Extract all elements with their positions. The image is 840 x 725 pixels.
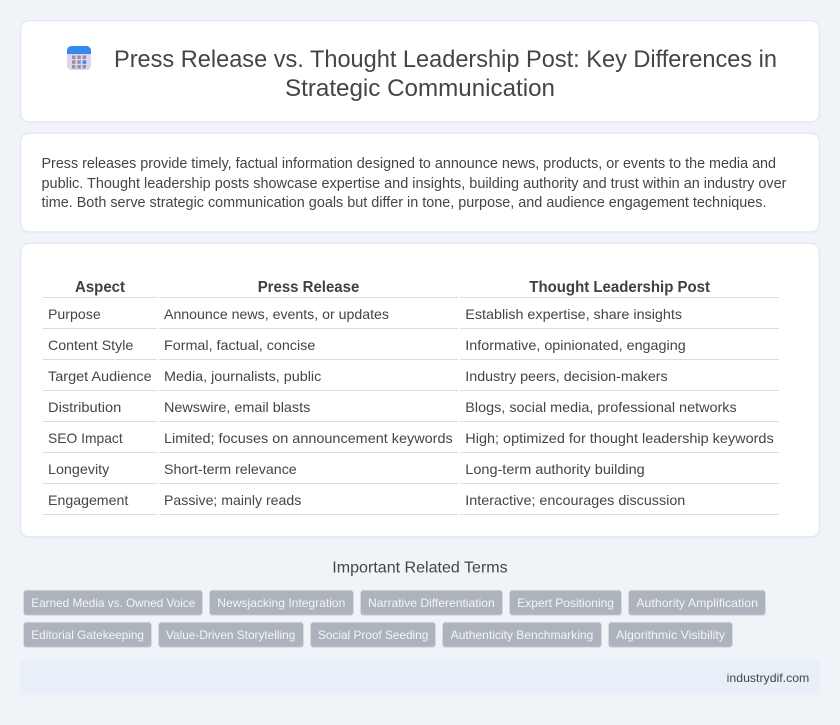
intro paragraph: public. Thought leadership posts showcase expertise and insights, building authority and trust within an industry over bbox=[42, 176, 787, 192]
table header row: Aspect bbox=[75, 279, 126, 296]
tag: newsjacking bbox=[210, 590, 354, 615]
intro paragraph: Press releases provide timely, factual information designed to announce news, products, or events to the media and bbox=[42, 156, 776, 172]
row: seo impact: Limited; focuses on announcement keywords bbox=[164, 430, 453, 446]
tag: social proof seeding: Social Proof Seeding bbox=[318, 628, 428, 642]
row: purpose: Establish expertise, share insights bbox=[465, 306, 682, 322]
header panel bbox=[21, 21, 819, 122]
table header row: Thought Leadership Post bbox=[529, 279, 711, 296]
row: distribution: Newswire, email blasts bbox=[164, 399, 310, 415]
table header row: Press Release bbox=[258, 279, 359, 296]
tag: narrative differentiation: Narrative Differentiation bbox=[368, 596, 495, 610]
tag: authority amplification: Authority Amplification bbox=[636, 596, 758, 610]
tag: algorithmic visibility: Algorithmic Visibility bbox=[616, 628, 725, 642]
heading: important related terms: Important Related Terms bbox=[332, 560, 508, 576]
intro paragraph bbox=[42, 156, 787, 211]
row: seo impact bbox=[43, 430, 779, 453]
tag: editorial gatekeeping: Editorial Gatekeeping bbox=[31, 628, 144, 642]
row: content style: Informative, opinionated, engaging bbox=[465, 337, 686, 353]
title bbox=[114, 46, 777, 102]
row: longevity: Long-term authority building bbox=[465, 461, 645, 477]
related terms tags bbox=[24, 590, 766, 647]
footer: industrydif.com bbox=[727, 671, 809, 685]
row: distribution: Blogs, social media, professional networks bbox=[465, 399, 737, 415]
table header row bbox=[43, 279, 779, 298]
row: purpose: Purpose bbox=[48, 306, 101, 322]
row: content style bbox=[43, 337, 779, 360]
panel: introduction bbox=[21, 133, 819, 232]
row: content style: Content Style bbox=[48, 337, 134, 353]
row: distribution bbox=[43, 399, 779, 422]
row: target audience: Target Audience bbox=[48, 368, 152, 384]
tag: earned media: Earned Media vs. Owned Voice bbox=[31, 596, 196, 610]
row: longevity bbox=[43, 461, 779, 484]
tag: authenticity benchmarking bbox=[442, 622, 602, 647]
tag: authority amplification bbox=[628, 590, 766, 615]
tag: expert positioning bbox=[510, 590, 622, 615]
row: engagement: Interactive; encourages discussion bbox=[465, 492, 685, 508]
title: Press Release vs. Thought Leadership Post: Key Differences in bbox=[114, 46, 777, 73]
panel: comparison table bbox=[21, 243, 819, 537]
tag: editorial gatekeeping bbox=[24, 622, 152, 647]
row: distribution: Distribution bbox=[48, 399, 121, 415]
tag: algorithmic visibility bbox=[608, 622, 732, 647]
title: Strategic Communication bbox=[285, 75, 555, 102]
row: seo impact: High; optimized for thought leadership keywords bbox=[465, 430, 774, 446]
tag: value-driven storytelling: Value-Driven Storytelling bbox=[166, 628, 295, 642]
row: engagement: Passive; mainly reads bbox=[164, 492, 301, 508]
tag: social proof seeding bbox=[310, 622, 436, 647]
tag: value-driven storytelling bbox=[158, 622, 304, 647]
tag: expert positioning: Expert Positioning bbox=[517, 596, 614, 610]
row: engagement: Engagement bbox=[48, 492, 128, 508]
tag: newsjacking: Newsjacking Integration bbox=[217, 596, 345, 610]
row: target audience bbox=[43, 368, 779, 391]
tag: earned media bbox=[24, 590, 202, 615]
row: purpose bbox=[43, 306, 779, 329]
row: longevity: Longevity bbox=[48, 461, 109, 477]
footer bbox=[20, 661, 820, 695]
tag: narrative differentiation bbox=[360, 590, 502, 615]
row: purpose: Announce news, events, or updates bbox=[164, 306, 389, 322]
icon: calendar bbox=[67, 46, 91, 70]
row: target audience: Industry peers, decision-makers bbox=[465, 368, 668, 384]
row: longevity: Short-term relevance bbox=[164, 461, 297, 477]
tag: authenticity benchmarking: Authenticity Benchmarking bbox=[451, 628, 593, 642]
row: seo impact: SEO Impact bbox=[48, 430, 123, 446]
row: engagement bbox=[43, 492, 779, 515]
row: content style: Formal, factual, concise bbox=[164, 337, 316, 353]
row: target audience: Media, journalists, public bbox=[164, 368, 321, 384]
intro paragraph: time. Both serve strategic communication goals but differ in tone, purpose, and audience engagement techniques. bbox=[42, 195, 766, 211]
